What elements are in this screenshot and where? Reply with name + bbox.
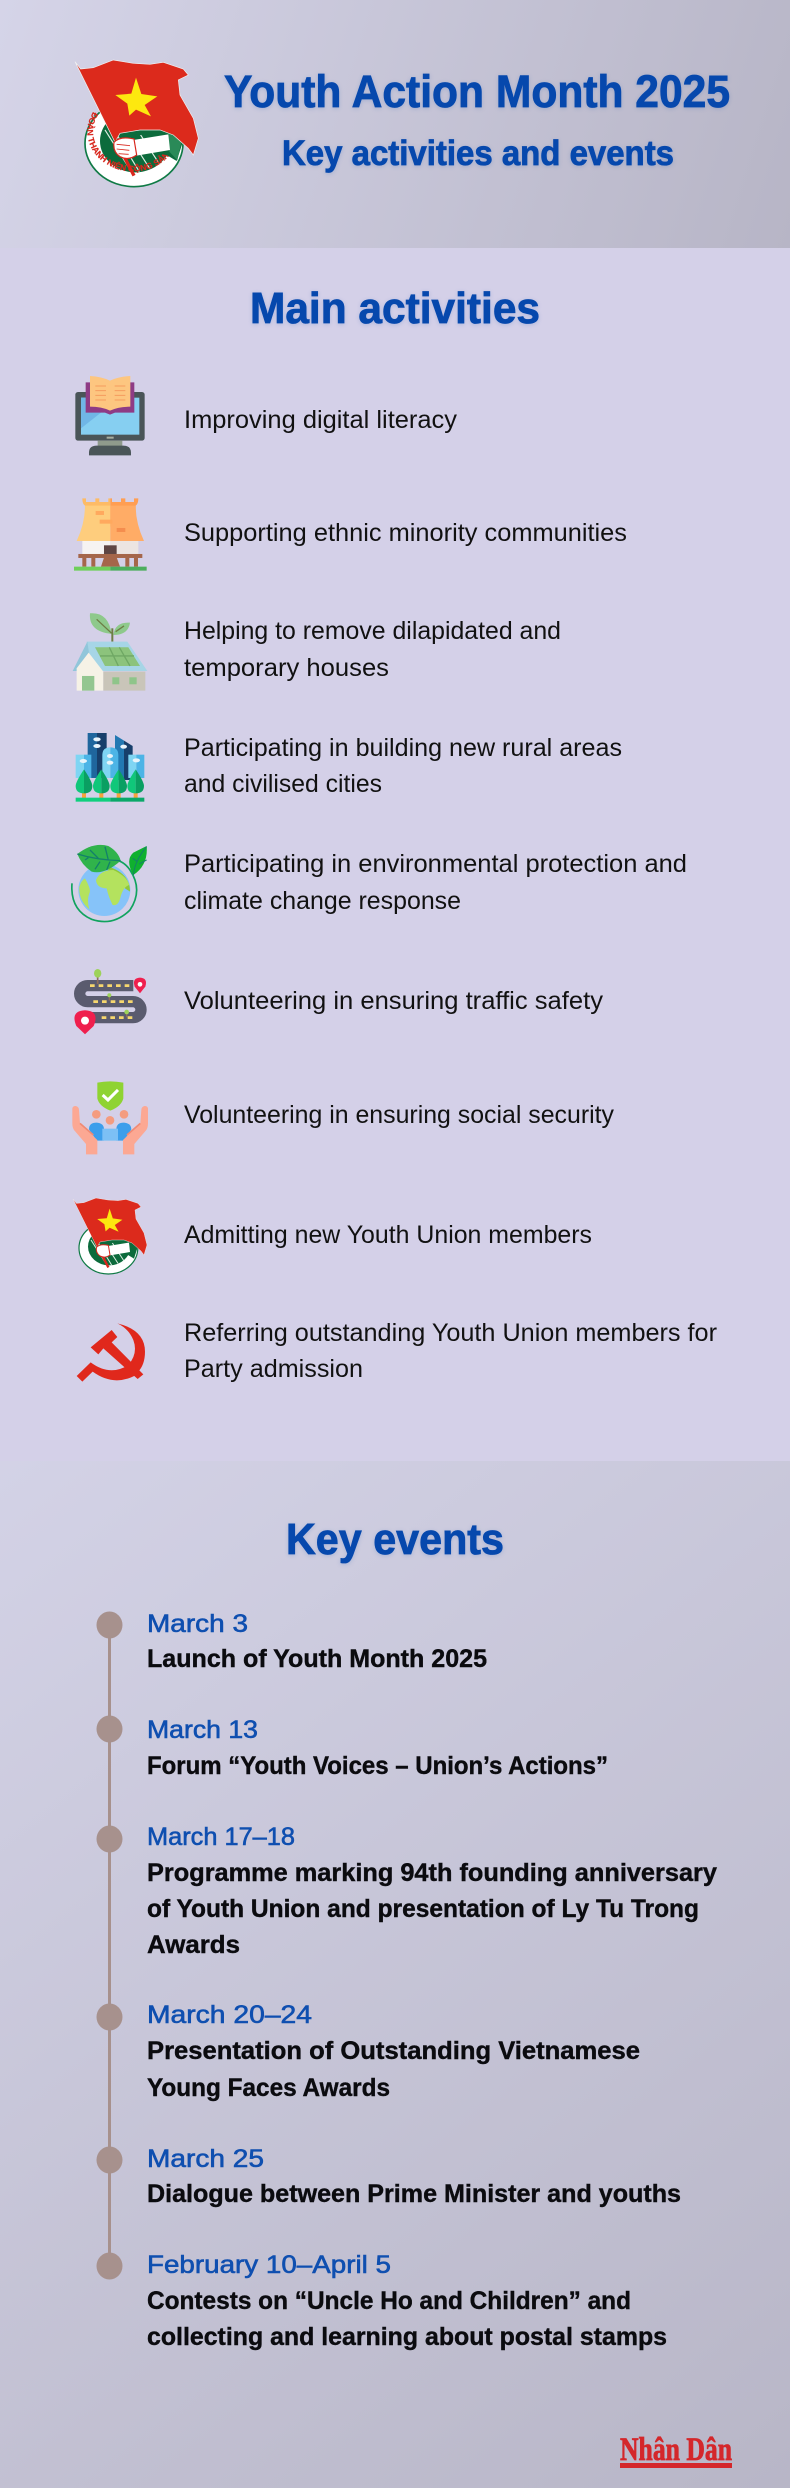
activity text: party admission: Party admission	[184, 1355, 363, 1383]
event: February 10-April 5	[147, 2251, 667, 2351]
event: March 17-18: Awards	[147, 1931, 240, 1959]
event: February 10-April 5: February 10–April 5	[147, 2251, 391, 2279]
icon: winding road	[74, 969, 146, 1034]
icon: globe with leaves	[72, 845, 147, 922]
event: March 20-24: March 20–24	[147, 2001, 312, 2029]
event: March 17-18: of Youth Union and presentation of Ly Tu Trong	[147, 1895, 699, 1923]
event: March 20-24	[147, 2001, 640, 2102]
event: February 10-April 5: collecting and learning about postal stamps	[147, 2323, 667, 2351]
heading: main activities: Main activities	[250, 284, 540, 333]
activity text: environment and climate	[184, 850, 687, 915]
event: March 3	[147, 1610, 487, 1673]
event: March 25	[147, 2145, 681, 2208]
activity text: ethnic minority communities: Supporting ethnic minority communities	[184, 519, 627, 547]
logo: Youth Union emblem: ĐOÀN THANH NIÊN CỘNG SẢN HỒ CHÍ MINH	[87, 112, 169, 173]
icon: hands with people and shield	[72, 1081, 148, 1154]
subtitle: Key activities and events	[282, 134, 674, 173]
activity text: environment and climate: Participating in environmental protection and	[184, 850, 687, 878]
activity text: dilapidated houses: Helping to remove dilapidated and	[184, 617, 561, 645]
panel: header	[74, 0, 790, 248]
title: Youth Action Month 2025	[224, 66, 730, 117]
activity text: rural areas and cities: and civilised cities	[184, 770, 382, 798]
event: March 3: Launch of Youth Month 2025	[147, 1645, 487, 1673]
event: March 20-24: Young Faces Awards	[147, 2074, 390, 2102]
activity text: new members: Admitting new Youth Union members	[184, 1221, 592, 1249]
icon: monitor with book	[75, 376, 145, 455]
event: March 17-18	[147, 1823, 717, 1959]
icon: city with trees	[76, 733, 144, 802]
event: March 17-18: March 17–18	[147, 1823, 295, 1851]
activity text: rural areas and cities: Participating in building new rural areas	[184, 734, 622, 762]
activity text: digital literacy: Improving digital literacy	[184, 406, 458, 434]
panel: key events	[0, 1461, 790, 2488]
activity text: dilapidated houses	[184, 617, 561, 682]
event: March 3: March 3	[147, 1610, 248, 1638]
icon: small Youth Union emblem	[73, 1198, 147, 1274]
activity text: traffic safety: Volunteering in ensuring traffic safety	[184, 987, 604, 1015]
panel: main activities	[0, 248, 790, 1461]
icon: green house with plant	[73, 613, 147, 691]
activity text: party admission: Referring outstanding Youth Union members for	[184, 1319, 717, 1347]
activity text: dilapidated houses: temporary houses	[184, 654, 389, 682]
event: February 10-April 5: Contests on “Uncle Ho and Children” and	[147, 2287, 631, 2315]
activity text: social security: Volunteering in ensuring social security	[184, 1101, 614, 1129]
event: March 20-24: Presentation of Outstanding Vietnamese	[147, 2037, 640, 2065]
heading: key events: Key events	[286, 1515, 504, 1564]
event: March 13: March 13	[147, 1716, 258, 1744]
activity text: party admission	[184, 1319, 717, 1383]
event: March 25: March 25	[147, 2145, 264, 2173]
event: March 25: Dialogue between Prime Minister and youths	[147, 2180, 681, 2208]
logo: Nhan Dan wordmark: Nhân Dân	[620, 2432, 732, 2468]
activity text: environment and climate: climate change response	[184, 887, 461, 915]
icon: hammer and sickle	[77, 1323, 145, 1382]
event: March 17-18: Programme marking 94th founding anniversary	[147, 1859, 717, 1887]
event: March 13: Forum “Youth Voices – Union’s Actions”	[147, 1752, 608, 1780]
activity text: rural areas and cities	[184, 734, 622, 798]
logo: Youth Union emblem	[74, 60, 199, 188]
event: March 13	[147, 1716, 608, 1780]
timeline line and dots	[96, 1612, 122, 2280]
icon: stilt house	[74, 498, 147, 571]
